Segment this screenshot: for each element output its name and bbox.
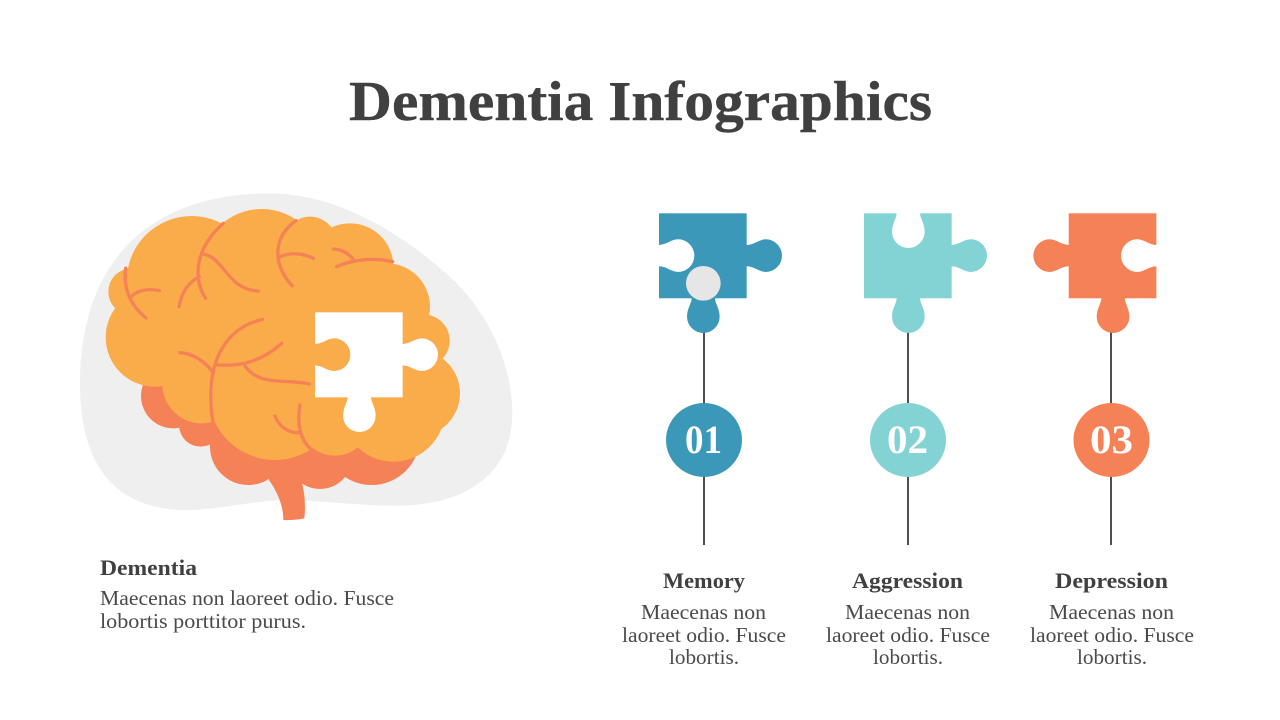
depression text: Maecenas non (1049, 600, 1175, 624)
left caption: Maecenas non laoreet odio. Fusce (100, 586, 394, 610)
connector line 3 (1110, 330, 1112, 545)
memory text: laoreet odio. Fusce (622, 623, 786, 647)
connector line 2 (907, 330, 909, 545)
memory text: Memory (663, 568, 745, 593)
brain illustration (80, 193, 512, 520)
number badge 01 (666, 403, 742, 477)
icon: white missing puzzle piece (315, 312, 438, 432)
aggression text: Maecenas non (845, 600, 971, 624)
column: aggression (826, 213, 990, 669)
icon: orange puzzle piece (1033, 213, 1157, 333)
aggression text (826, 568, 990, 669)
column: memory (622, 213, 786, 669)
aggression text: laoreet odio. Fusce (826, 623, 990, 647)
icon: blue puzzle piece (659, 213, 782, 333)
brain folds (125, 221, 393, 450)
left caption (100, 555, 394, 633)
number badge 03 (1074, 403, 1150, 477)
depression text: Depression (1055, 568, 1168, 593)
depression text: laoreet odio. Fusce (1030, 623, 1194, 647)
number badge 02 (870, 403, 946, 477)
grey background blob (80, 193, 512, 510)
left caption: Dementia (100, 555, 197, 580)
column: depression (1030, 213, 1194, 669)
icon: teal puzzle piece (864, 213, 987, 333)
depression text (1030, 568, 1194, 669)
memory text: lobortis. (669, 645, 739, 669)
left caption: lobortis porttitor purus. (100, 609, 306, 633)
connector line 1 (703, 330, 705, 545)
memory text: Maecenas non (641, 600, 767, 624)
title: Dementia Infographics (349, 71, 932, 133)
depression text: lobortis. (1077, 645, 1147, 669)
brain main lobes (106, 209, 460, 462)
aggression text: Aggression (852, 568, 963, 593)
number badge 03: 03 (1090, 417, 1133, 462)
number badge 01: 01 (685, 417, 722, 462)
number badge 02: 02 (887, 417, 928, 462)
brain underside and stem (141, 364, 420, 520)
memory text (622, 568, 786, 669)
aggression text: lobortis. (873, 645, 943, 669)
